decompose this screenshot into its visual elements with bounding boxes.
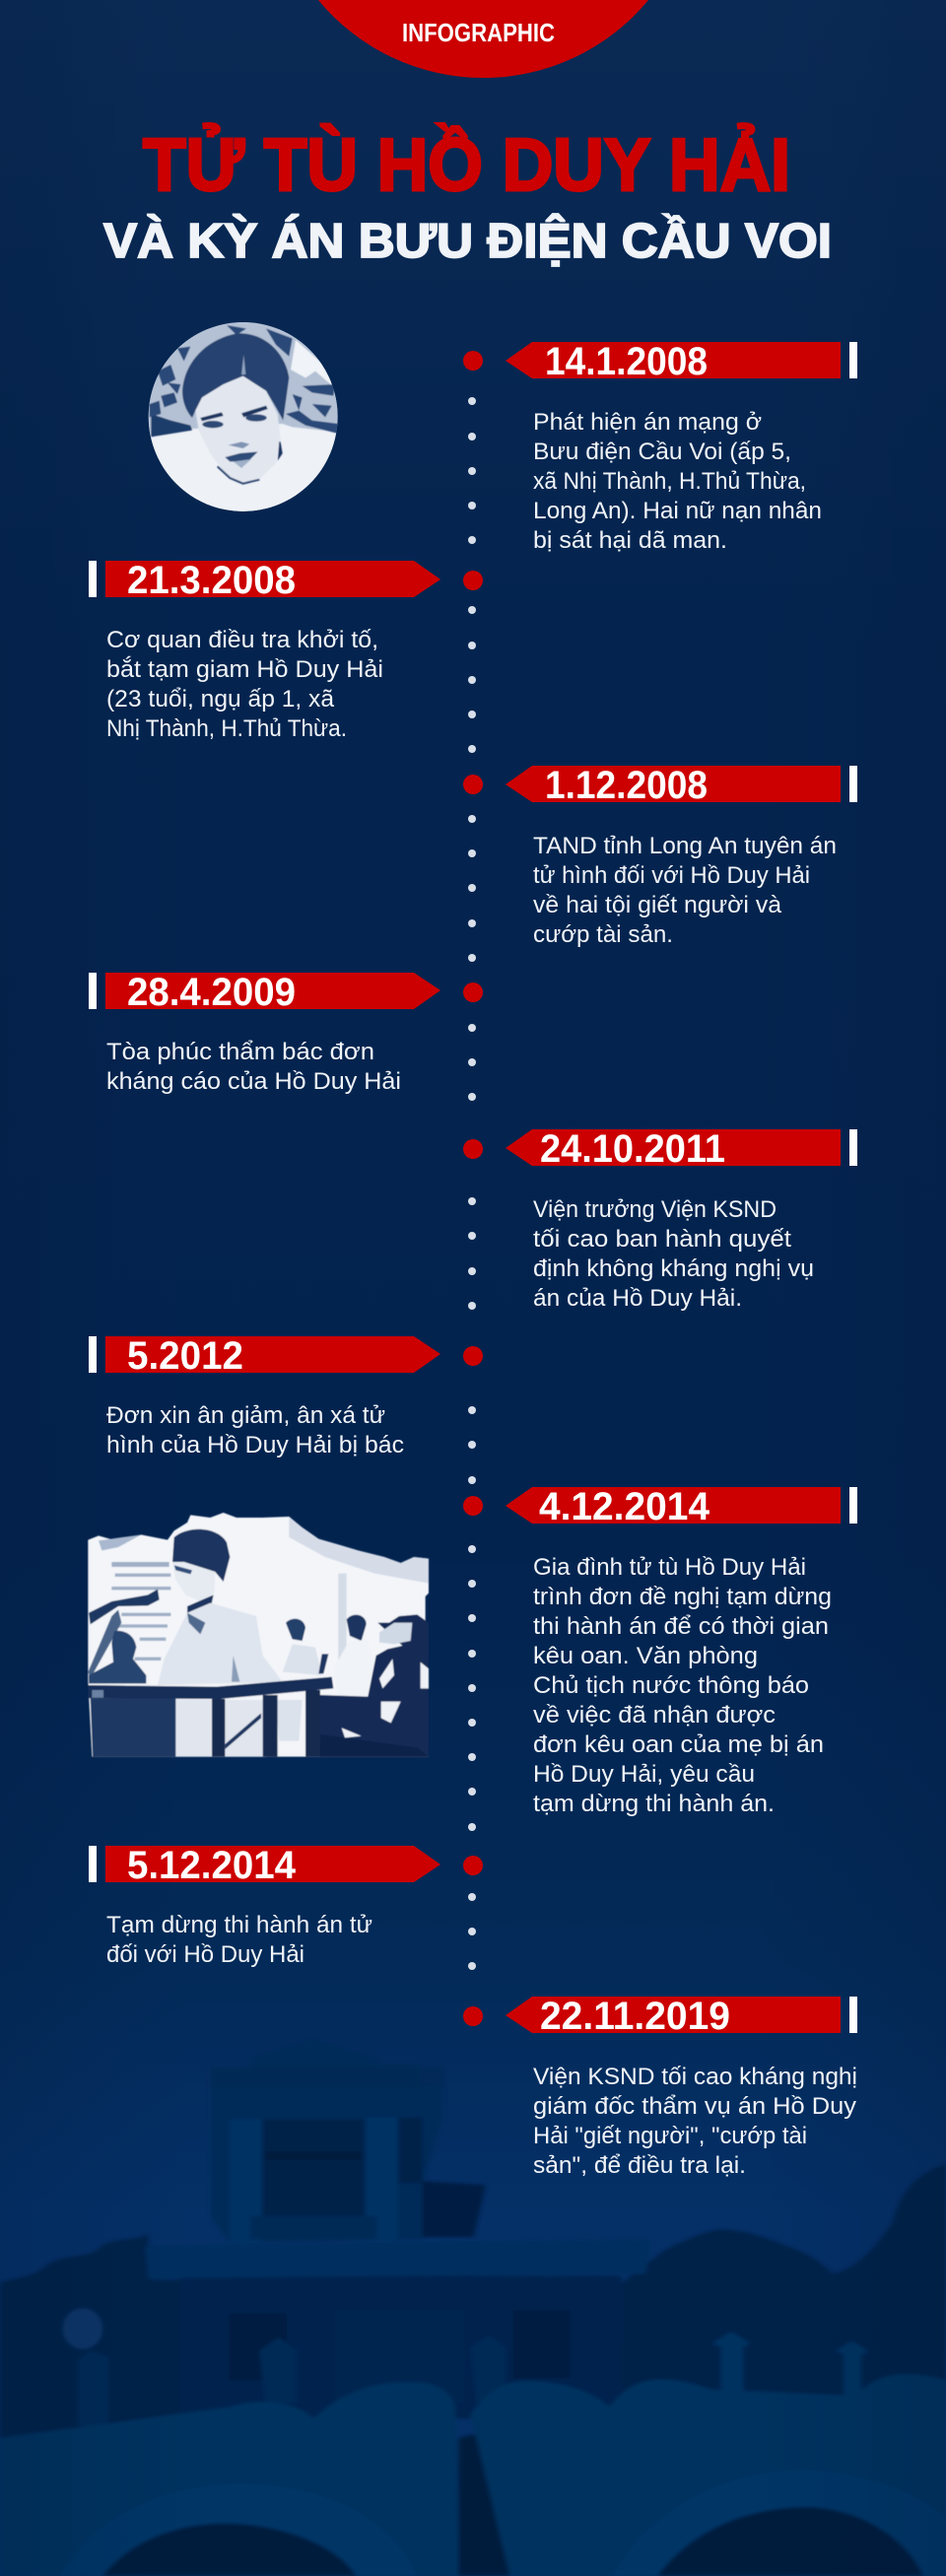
event: 5.2012: Đơn xin ân giảm, ân xá tử bbox=[106, 1402, 385, 1429]
event: 5.2012 bbox=[89, 1334, 483, 1458]
event: 1.12.2008 bbox=[463, 764, 857, 948]
event: 24.10.2011 bbox=[463, 1127, 857, 1312]
portrait photo of Hồ Duy Hải bbox=[149, 318, 338, 511]
event: 4.12.2014 bbox=[463, 1485, 857, 1817]
courtroom photo bbox=[88, 1513, 429, 1757]
background: post office photo bbox=[0, 2039, 946, 2576]
event: 14.1.2008: Long An). Hai nữ nạn nhân bbox=[533, 498, 822, 524]
title: TỬ TÙ HỒ DUY HẢI bbox=[143, 123, 790, 206]
header badge bbox=[318, 0, 648, 78]
event: 4.12.2014: thi hành án để có thời gian bbox=[533, 1613, 829, 1640]
event: 22.11.2019: giám đốc thẩm vụ án Hồ Duy bbox=[533, 2093, 856, 2120]
event: 4.12.2014: tạm dừng thi hành án. bbox=[533, 1791, 775, 1817]
event: 21.3.2008 bbox=[89, 559, 483, 742]
event: 28.4.2009: 28.4.2009 bbox=[127, 971, 296, 1014]
event: 14.1.2008: Phát hiện án mạng ở bbox=[533, 409, 762, 436]
event: 5.12.2014: 5.12.2014 bbox=[127, 1844, 297, 1887]
header badge: INFOGRAPHIC bbox=[402, 18, 555, 47]
event: 21.3.2008: Cơ quan điều tra khởi tố, bbox=[106, 627, 378, 653]
event: 4.12.2014: về việc đã nhận được bbox=[533, 1702, 776, 1729]
event: 4.12.2014: Hồ Duy Hải, yêu cầu bbox=[533, 1761, 755, 1788]
event: 24.10.2011: 24.10.2011 bbox=[540, 1127, 725, 1171]
event: 24.10.2011: án của Hồ Duy Hải. bbox=[533, 1285, 742, 1312]
event: 14.1.2008: Bưu điện Cầu Voi (ấp 5, bbox=[533, 439, 791, 465]
event: 4.12.2014: Gia đình tử tù Hồ Duy Hải bbox=[533, 1554, 806, 1581]
event: 4.12.2014: kêu oan. Văn phòng bbox=[533, 1643, 758, 1669]
event: 14.1.2008: xã Nhị Thành, H.Thủ Thừa, bbox=[533, 468, 806, 495]
event: 24.10.2011: định không kháng nghị vụ bbox=[533, 1255, 814, 1282]
event: 21.3.2008: 21.3.2008 bbox=[127, 559, 296, 602]
event: 28.4.2009 bbox=[89, 971, 483, 1095]
event: 14.1.2008: 14.1.2008 bbox=[545, 340, 708, 383]
event: 1.12.2008: cướp tài sản. bbox=[533, 921, 673, 948]
event: 5.2012: hình của Hồ Duy Hải bị bác bbox=[106, 1432, 404, 1458]
event: 14.1.2008 bbox=[463, 340, 857, 554]
event: 24.10.2011: tối cao ban hành quyết bbox=[533, 1226, 791, 1253]
event: 4.12.2014: trình đơn đề nghị tạm dừng bbox=[533, 1584, 832, 1610]
event: 1.12.2008: 1.12.2008 bbox=[545, 764, 708, 807]
event: 4.12.2014: đơn kêu oan của mẹ bị án bbox=[533, 1731, 824, 1758]
title: VÀ KỲ ÁN BƯU ĐIỆN CẦU VOI bbox=[103, 214, 832, 268]
event: 22.11.2019: 22.11.2019 bbox=[540, 1995, 730, 2038]
event: 5.12.2014: Tạm dừng thi hành án tử bbox=[106, 1912, 372, 1938]
event: 1.12.2008: về hai tội giết người và bbox=[533, 892, 782, 918]
event: 22.11.2019: Viện KSND tối cao kháng nghị bbox=[533, 2064, 857, 2090]
event: 28.4.2009: kháng cáo của Hồ Duy Hải bbox=[106, 1068, 401, 1095]
event: 1.12.2008: TAND tỉnh Long An tuyên án bbox=[533, 833, 837, 859]
event: 4.12.2014: 4.12.2014 bbox=[539, 1485, 710, 1528]
event: 4.12.2014: Chủ tịch nước thông báo bbox=[533, 1672, 809, 1699]
event: 21.3.2008: (23 tuổi, ngụ ấp 1, xã bbox=[106, 686, 335, 712]
title bbox=[103, 123, 832, 268]
event: 5.2012: 5.2012 bbox=[127, 1334, 243, 1378]
event: 5.12.2014 bbox=[89, 1844, 483, 1968]
event: 14.1.2008: bị sát hại dã man. bbox=[533, 527, 727, 554]
event: 22.11.2019 bbox=[463, 1995, 857, 2179]
event: 22.11.2019: sản", để điều tra lại. bbox=[533, 2152, 746, 2179]
timeline dots bbox=[468, 397, 476, 1970]
event: 5.12.2014: đối với Hồ Duy Hải bbox=[106, 1941, 304, 1968]
event: 28.4.2009: Tòa phúc thẩm bác đơn bbox=[106, 1039, 374, 1065]
event: 1.12.2008: tử hình đối với Hồ Duy Hải bbox=[533, 862, 810, 889]
event: 24.10.2011: Viện trưởng Viện KSND bbox=[533, 1196, 777, 1223]
event: 21.3.2008: Nhị Thành, H.Thủ Thừa. bbox=[106, 715, 347, 742]
event: 22.11.2019: Hải "giết người", "cướp tài bbox=[533, 2123, 807, 2149]
event: 21.3.2008: bắt tạm giam Hồ Duy Hải bbox=[106, 656, 383, 683]
